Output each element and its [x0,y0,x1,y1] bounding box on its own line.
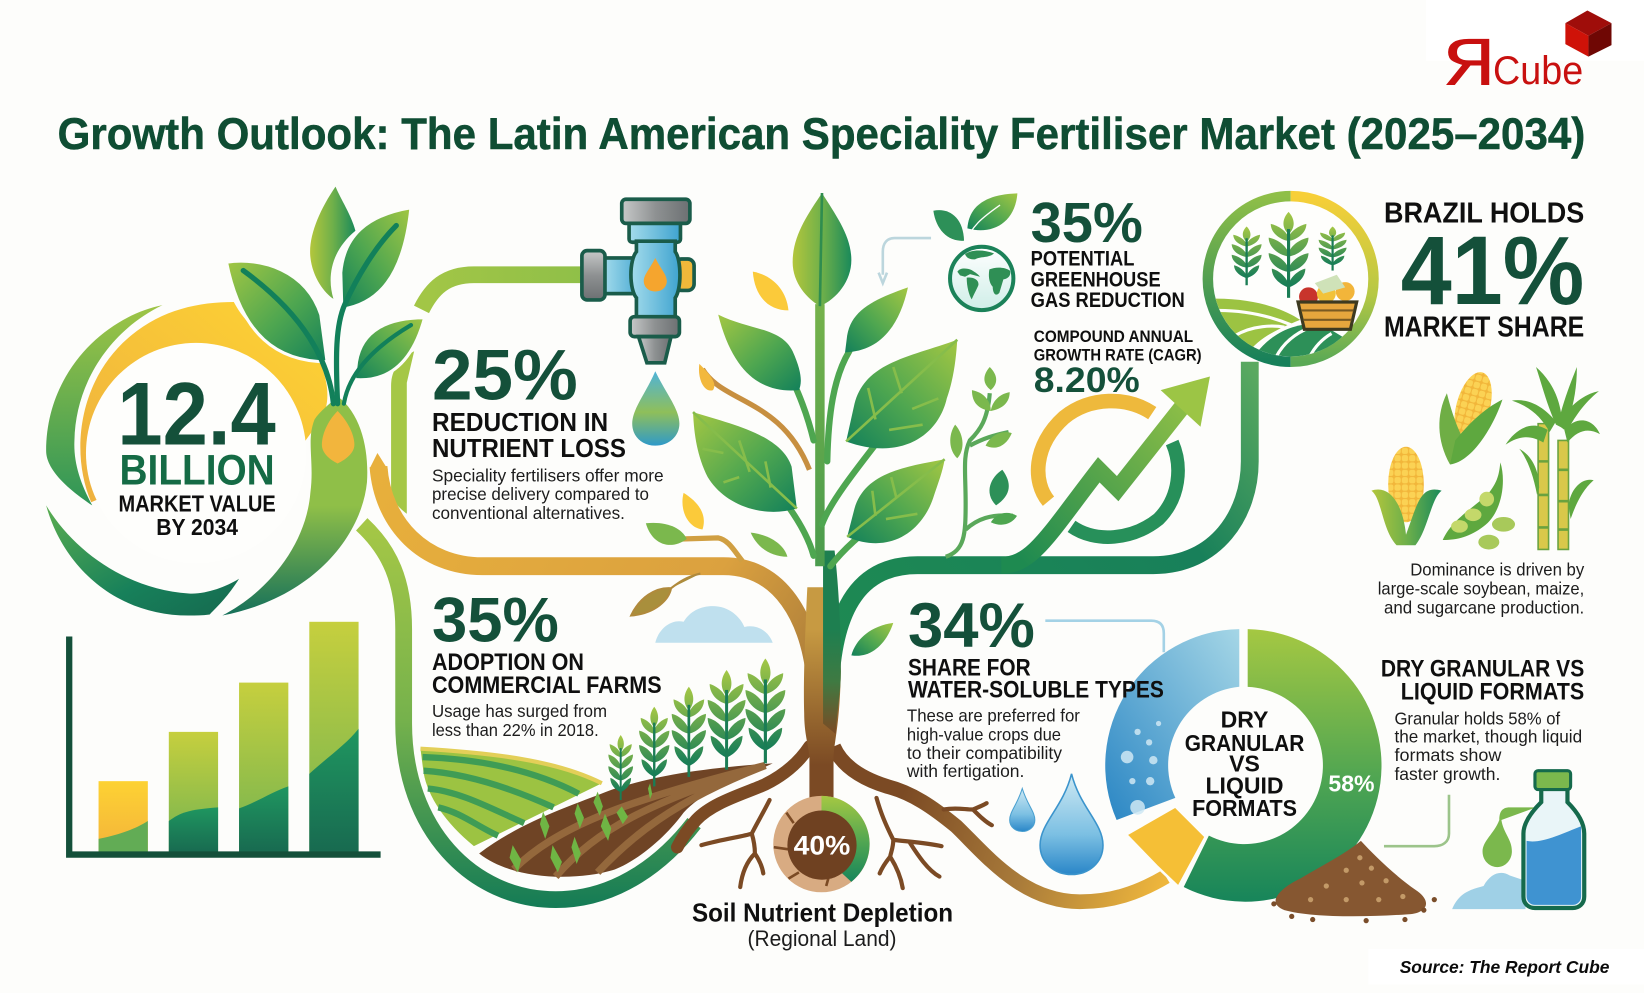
sprout top leaf [310,187,355,299]
tap handle side [675,259,694,290]
chart axes [69,636,381,855]
body: faster growth. [1394,764,1500,784]
tap body [631,241,680,318]
sprig [946,367,1017,557]
heading: GAS REDUCTION [1031,289,1185,312]
stat: water soluble [906,591,1164,781]
wheat row [608,658,785,800]
path: vertical green [391,351,414,514]
connector arrow [879,238,931,283]
text: Brazil dominance: large-scale soybean, maize, [1378,579,1584,599]
heading [432,407,626,463]
emblem: market value [46,187,425,616]
stat: Brazil share [1384,196,1584,343]
heading: NUTRIENT LOSS [432,433,626,463]
source: Source: The Report Cube [1400,957,1609,977]
stem branches [713,351,928,566]
trunk [804,587,841,799]
body: Speciality fertilisers offer more [432,465,664,485]
emblem yellow crescent [80,302,327,502]
number: 34% [908,591,1035,661]
heading [432,649,662,699]
emblem caption [118,491,276,540]
connector [1045,621,1164,652]
tap oil drop [644,258,667,292]
continents [957,251,1010,299]
text: Brazil dominance: Dominance is driven by [1410,560,1585,580]
stat: greenhouse gas [1031,191,1185,312]
ring [1208,196,1373,362]
emblem seed [322,411,354,463]
bubbles [1121,721,1161,815]
tap inlet [582,251,605,300]
number: 35% [1031,191,1143,254]
body: the market, though liquid [1394,726,1582,746]
soil depletion label: Soil Nutrient Depletion [692,898,953,928]
cloud splash [1452,873,1526,909]
leaf upper right [845,287,908,352]
leaf lower right [847,459,945,543]
heading: SHARE FOR [908,654,1031,681]
yellow arc [1038,401,1152,501]
lower stem leaf [851,623,893,656]
soil depletion label: (Regional Land) [748,926,896,951]
bottom line: MARKET SHARE [1384,311,1584,343]
bar 4 [309,622,359,852]
donut centre label: VS [1229,751,1260,777]
green segment [1184,629,1382,902]
connector paths [362,275,1250,900]
seedlings [510,783,652,872]
icon: corn left [1371,447,1442,545]
logo cube [1565,11,1611,57]
donut centre label [1185,707,1305,821]
emblem number: 12.4 [117,364,276,464]
stat: dry vs liquid [1381,655,1584,784]
leaf upper left [718,315,801,390]
ring centre [787,811,857,880]
badge value: 40% [794,830,850,861]
soil depletion badge [773,796,870,892]
source [1368,949,1644,985]
small green leaves [646,523,787,557]
emblem unit: BILLION [120,446,275,494]
soil furrows [479,763,773,877]
bar 1 [99,781,148,852]
heading: WATER-SOLUBLE TYPES [908,676,1164,703]
text: Brazil dominance [1378,560,1585,617]
bottle liquid [1527,826,1581,905]
big drop [1040,774,1103,874]
bottle body [1523,788,1584,908]
left main root [677,747,809,847]
icon: sugarcane [1506,367,1600,549]
small drop [1010,788,1035,831]
basket [1298,275,1357,329]
logo: RCube [1441,11,1611,100]
heading: POTENTIAL [1031,247,1135,270]
globe small leaf [933,210,964,241]
path: left green [362,524,694,900]
illustration: farm field [420,658,785,877]
stat: CAGR [1034,328,1202,400]
path: orange branch [378,467,816,682]
fields [1216,298,1342,356]
tree top leaf [793,193,851,306]
path: right green [830,362,1250,682]
stat: commercial farms [432,586,662,740]
body: precise delivery compared to [432,484,649,504]
bar chart [69,622,381,855]
soil depletion label [692,898,953,951]
bar 2 [169,732,218,852]
icon: growth arrow with ring [1001,376,1210,565]
field hill [420,749,602,846]
root arrow swoosh [834,747,1166,902]
bar 3 [239,683,288,852]
emblem lower crescent [46,505,239,616]
heading: GREENHOUSE [1031,268,1161,291]
body: Usage has surged from [432,701,607,721]
connector: format link [1384,795,1449,846]
tap cap [622,199,690,223]
number: 25% [432,336,578,416]
donut chart [1105,629,1382,902]
label: GROWTH RATE (CAGR) [1034,347,1202,365]
right side roots [877,798,992,888]
heading: DRY GRANULAR VS [1381,655,1584,682]
value: 8.20% [1034,360,1140,400]
illustration: central tree [631,193,1166,902]
yellow leaves [682,272,788,530]
ring cracks [774,813,828,886]
tap nozzle [639,337,671,363]
icon: liquid bottle [1452,771,1584,909]
body: high-value crops due [907,724,1061,744]
logo mark: Я [1441,27,1497,100]
body: conventional alternatives. [432,503,625,523]
left sub roots [701,800,770,887]
tap collar [630,317,679,337]
donut centre label: GRANULAR [1185,730,1305,756]
trunk green side [823,550,841,734]
main stem [815,304,824,566]
icon: farm circle [1206,196,1373,372]
globe [950,247,1013,310]
emblem caption: BY 2034 [156,514,238,540]
donut centre label: LIQUID [1205,773,1284,799]
body: with fertigation. [906,761,1024,781]
body: to their compatibility [907,743,1062,763]
top line: BRAZIL HOLDS [1384,196,1584,228]
bottle cap [1535,771,1571,790]
leaf big left [693,412,797,512]
body: Granular holds 58% of [1394,709,1560,729]
tap neck [629,221,680,242]
heading: ADOPTION ON [432,649,584,676]
arrow head [1161,376,1210,427]
logo word: Cube [1493,49,1583,93]
text: Brazil dominance: and sugarcane production. [1384,597,1584,617]
yellow arrow segment [1126,806,1206,887]
orange branch tip [370,453,388,470]
sprout stems [243,225,411,404]
tap arm [603,258,645,294]
heading [908,654,1164,703]
tree roots [677,747,992,888]
emblem right body [222,396,367,616]
body: less than 22% in 2018. [432,720,599,740]
heading: REDUCTION IN [432,407,608,437]
sprout right leaf [341,208,411,309]
brown leaf [631,574,700,616]
body [432,701,607,740]
stat: nutrient loss [432,336,664,523]
path: top green [421,275,584,309]
globe stem [965,205,1000,245]
label [1034,328,1202,365]
body [906,705,1080,781]
icon: tap [582,199,694,363]
drip [1483,807,1536,867]
icon: globe with leaves [879,193,1017,310]
donut centre label: FORMATS [1192,795,1297,821]
globe large leaf [967,193,1017,230]
number: 41% [1401,216,1584,325]
body: These are preferred for [907,705,1080,725]
icon: soybean pod [1443,462,1515,549]
plants [1232,212,1347,298]
icon: water drop under tap [632,371,679,446]
body: formats show [1394,745,1502,765]
heading: COMMERCIAL FARMS [432,672,662,699]
icon: granule pile [1271,841,1437,923]
leaf big right [846,340,957,448]
number: 35% [432,586,559,656]
arrow shaft [1001,404,1185,565]
ring green [821,796,870,882]
donut centre label: DRY [1221,707,1268,733]
small left branch [682,538,742,561]
icon: cloud [655,606,773,643]
sprout small leaf [354,318,425,380]
icon: corn right [1439,368,1502,465]
sprout left leaf [226,261,327,362]
label: COMPOUND ANNUAL [1034,328,1193,346]
body [432,465,664,523]
orange twig [702,369,809,470]
heading [1031,247,1185,312]
body [1394,709,1582,784]
donut value: 58% [1328,771,1375,797]
blue segment [1105,629,1239,820]
emblem caption: MARKET VALUE [118,491,276,517]
green arc [1072,443,1178,537]
heading [1381,655,1584,705]
heading: LIQUID FORMATS [1401,678,1584,705]
emblem upper crescent [46,305,163,505]
icons: water drops [1010,774,1103,874]
orange bud [699,364,714,391]
ring tan [773,796,870,892]
title: Growth Outlook: The Latin American Speciality Fertiliser Market (2025–2034) [58,110,1585,159]
